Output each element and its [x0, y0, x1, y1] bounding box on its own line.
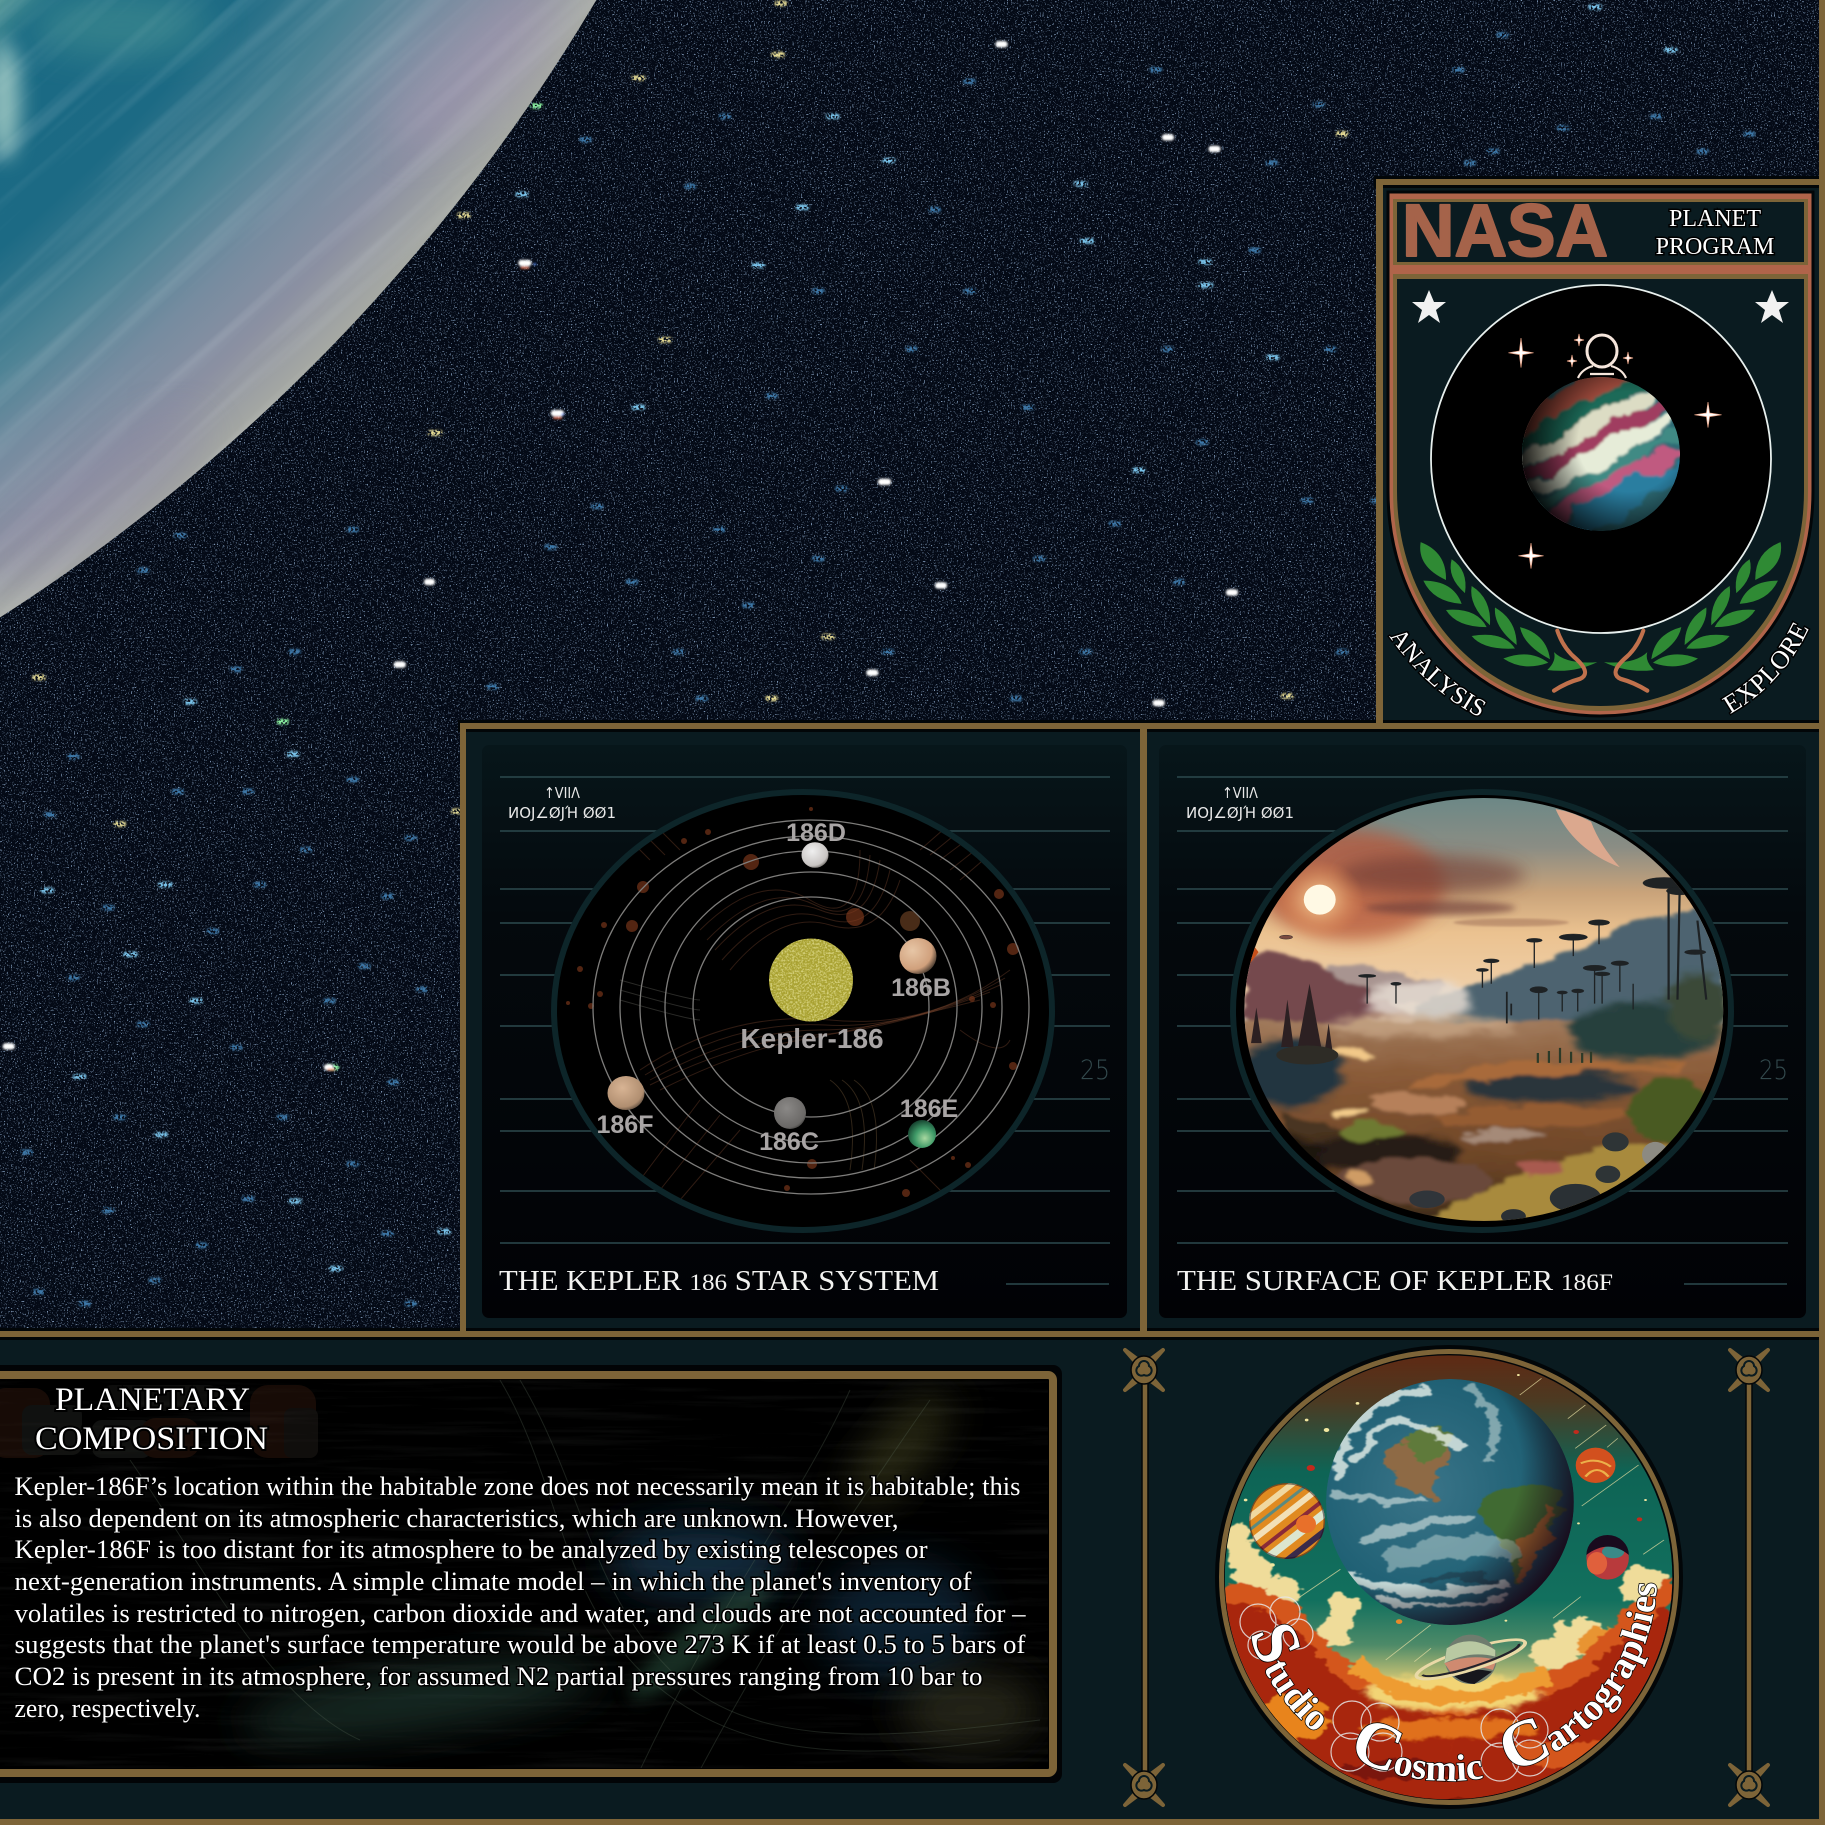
- star: Kepler-186: [769, 938, 853, 1022]
- planet labels: 186C: [759, 1128, 819, 1156]
- page number: 25: [1759, 1055, 1788, 1086]
- panel: planetary composition: [0, 1365, 1062, 1783]
- panel: surface of Kepler 186F: [1159, 745, 1806, 1318]
- NASA mission emblem: [1386, 189, 1814, 718]
- body text: suggests that the planet's surface temperature would be above 273 K if at least 0.5 to 5 bars of: [14, 1630, 1026, 1659]
- Jupiter: [1238, 1474, 1340, 1571]
- planet labels: 186D: [786, 819, 846, 847]
- icon: skull ornament bottom: [1125, 1765, 1163, 1805]
- planet labels: Kepler-186: [740, 1023, 884, 1054]
- script caption: ИOJ∠ØJΉ ØØ1: [508, 804, 616, 822]
- laurel wreath: [1420, 542, 1781, 691]
- page number: 25: [1080, 1055, 1110, 1086]
- studio name: StudioCosmicCartographies: [1250, 1582, 1658, 1782]
- body text: volatiles is restricted to nitrogen, carbon dioxide and water, and clouds are not accounted for –: [14, 1599, 1027, 1628]
- heading: COMPOSITION: [35, 1421, 268, 1457]
- ruled lines: [1177, 777, 1788, 1284]
- program label: PLANET: [1669, 206, 1761, 232]
- planet labels: 186B: [891, 974, 951, 1002]
- program label: PROGRAM: [1656, 234, 1774, 260]
- landscape medallion: [1233, 792, 1731, 1230]
- Earth: [1326, 1379, 1574, 1625]
- flow lines and dust: [566, 780, 1030, 1200]
- body text: next-generation instruments. A simple climate model – in which the planet's inventory of: [14, 1567, 972, 1596]
- shield outline: [1388, 192, 1813, 716]
- icon: skull ornament bottom: [1730, 1765, 1768, 1805]
- icon: skull ornament top: [1730, 1350, 1768, 1390]
- decorative column right: [1730, 1350, 1768, 1805]
- planet with swirling bands: [1522, 377, 1680, 531]
- planet labels: [597, 819, 958, 1156]
- capital flourishes: [1240, 1597, 1548, 1781]
- script caption: ↑VIIΛ: [1222, 784, 1259, 802]
- icon: sparkles: [1508, 334, 1722, 569]
- script caption: [508, 784, 616, 822]
- NASA logotype: NASA: [1402, 189, 1608, 272]
- body text: zero, respectively.: [14, 1694, 200, 1723]
- orbit diagram: [554, 780, 1052, 1230]
- icon: skull ornament top: [1125, 1350, 1163, 1390]
- body text: [14, 1472, 1027, 1723]
- script caption: ИOJ∠ØJΉ ØØ1: [1186, 804, 1294, 822]
- script caption: [1186, 784, 1294, 822]
- panel: Kepler 186 star system: [482, 745, 1127, 1318]
- meteor streaks: [1298, 1378, 1664, 1662]
- textured background: [0, 1379, 1048, 1770]
- heading: PLANETARY: [55, 1382, 250, 1418]
- large planet limb: [0, 0, 596, 618]
- small planets: [1576, 1448, 1629, 1580]
- painted scene: [1216, 1353, 1687, 1803]
- panel title: THE KEPLER 186 STAR SYSTEM: [499, 1266, 939, 1297]
- star streaks: [6, 3, 1753, 1304]
- EXPLORE label: EXPLORE: [1720, 620, 1810, 716]
- body text: Kepler-186F’s location within the habitable zone does not necessarily mean it is habitable; this: [14, 1472, 1020, 1501]
- ANALYSIS label: ANALYSIS: [1387, 630, 1488, 717]
- body text: CO2 is present in its atmosphere, for assumed N2 partial pressures ranging from 10 bar to: [14, 1662, 982, 1691]
- central black disc: [1431, 285, 1771, 633]
- Saturn: [1411, 1633, 1530, 1686]
- medal: Studio Cosmic Cartographies: [1215, 1345, 1683, 1809]
- planets: [608, 842, 936, 1148]
- script caption: ↑VIIΛ: [544, 784, 581, 802]
- decorative column left: [1125, 1350, 1163, 1805]
- heading: [35, 1382, 268, 1457]
- program label: [1656, 206, 1774, 260]
- planet labels: 186E: [900, 1095, 958, 1123]
- panel title: THE SURFACE OF KEPLER 186F: [1177, 1266, 1613, 1297]
- ruled lines: [500, 777, 1110, 1284]
- body text: Kepler-186F is too distant for its atmosphere to be analyzed by existing telescopes or: [14, 1535, 928, 1564]
- planet labels: 186F: [597, 1111, 653, 1139]
- icon: astronaut helmet: [1578, 335, 1626, 378]
- icon: two white stars: [1412, 290, 1789, 323]
- body text: is also dependent on its atmospheric characteristics, which are unknown. However,: [14, 1504, 898, 1533]
